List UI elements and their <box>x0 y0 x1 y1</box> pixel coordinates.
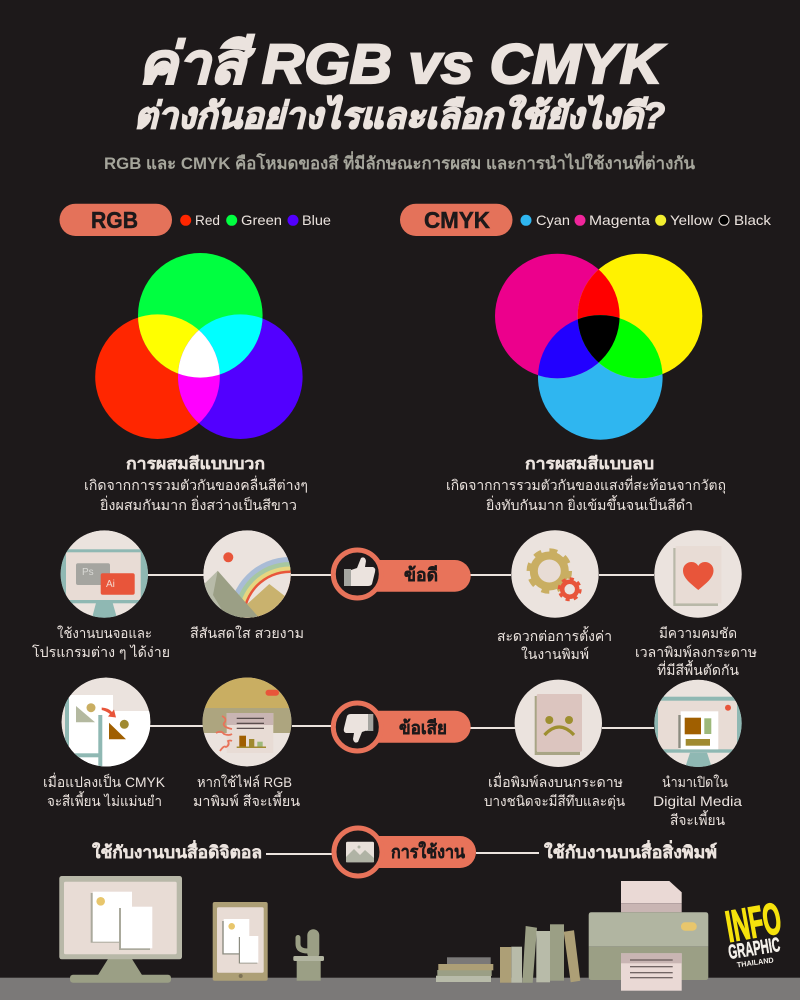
text block: subtractive mixing <box>446 454 726 513</box>
text block: additive mixing <box>84 454 308 513</box>
caption: RGB file printed shifts colour: หากใช้ไฟล์ RGB <box>197 774 292 790</box>
caption: sharp on contrast paper: ที่มีสีพื้นตัดกัน <box>657 660 739 678</box>
text block: additive mixing: ยิ่งผสมกันมาก ยิ่งสว่างเป็นสีขาว <box>100 496 297 513</box>
RGB legend <box>180 212 331 228</box>
CMYK legend: Yellow <box>670 212 714 228</box>
caption: easy print settings: สะดวกต่อการตั้งค่า <box>497 626 612 644</box>
caption: shifts in digital media <box>653 774 742 828</box>
badge: pros: ข้อดี <box>404 565 438 585</box>
icon: rainbow and mountains <box>203 530 291 618</box>
CMYK heading pill: CMYK <box>424 207 490 233</box>
CMYK legend: Magenta <box>589 212 650 228</box>
caption: shifts in digital media: สีจะเพี้ยน <box>670 810 725 828</box>
text block: subtractive mixing: ยิ่งทับกันมาก ยิ่งเข้มขึ้นจนเป็นสีดำ <box>486 495 693 513</box>
title: ค่าสี RGB vs CMYK <box>138 32 666 95</box>
icon: picture <box>346 842 374 862</box>
caption: CMYK conversion shifts colour <box>43 773 166 809</box>
CMYK legend: Black <box>734 212 772 228</box>
illustration: printer <box>589 881 708 991</box>
caption: dull on some papers: เมื่อพิมพ์ลงบนกระดาษ <box>488 773 623 790</box>
icon: monitor with Ps and Ai: Ai <box>106 579 115 590</box>
icon: monitor with Ps and Ai: Ps <box>82 567 94 578</box>
usage label: digital: ใช้กับงานบนสื่อดิจิตอล <box>92 840 262 862</box>
caption: easy print settings: ในงานพิมพ์ <box>521 646 589 662</box>
caption: shifts in digital media: นำมาเปิดใน <box>662 774 728 790</box>
RGB additive Venn diagram <box>95 253 303 439</box>
text block: additive mixing: เกิดจากการรวมตัวกันของคลื่นสีต่างๆ <box>84 476 308 493</box>
caption: sharp on contrast paper <box>635 625 757 678</box>
floor <box>0 978 800 1000</box>
badge: usage <box>334 828 476 876</box>
badge: pros <box>333 550 471 598</box>
caption: sharp on contrast paper: มีความคมชัด <box>659 625 737 641</box>
CMYK heading pill <box>400 204 512 236</box>
icon: thumbs up <box>344 557 375 586</box>
caption: use on screen: โปรแกรมต่าง ๆ ได้ง่าย <box>32 644 170 660</box>
RGB heading pill: RGB <box>91 207 138 233</box>
icon: book with heart <box>654 530 742 618</box>
caption: dull on some papers <box>484 773 625 810</box>
caption: CMYK conversion shifts colour: จะสีเพี้ยน ไม่แม่นยำ <box>47 791 162 809</box>
title: ต่างกันอย่างไรและเลือกใช้ยังไงดี? <box>134 95 665 136</box>
caption: dull on some papers: บางชนิดจะมีสีทึบและตุ่น <box>484 793 625 810</box>
icon: printing RGB file <box>200 675 295 766</box>
illustration: upright books <box>500 924 580 983</box>
caption: CMYK conversion shifts colour: เมื่อแปลงเป็น CMYK <box>43 773 166 790</box>
icon: monitor with Ps and Ai <box>58 530 148 618</box>
caption: use on screen <box>32 625 170 660</box>
RGB legend: Red <box>195 212 220 228</box>
caption: RGB file printed shifts colour <box>193 774 300 809</box>
CMYK legend: Cyan <box>536 212 570 228</box>
caption: vivid colors: สีสันสดใส สวยงาม <box>190 625 304 641</box>
title <box>134 32 666 136</box>
illustration: desktop monitor <box>59 876 182 983</box>
caption: easy print settings <box>497 626 612 662</box>
RGB legend: Green <box>241 212 282 228</box>
logo: Infographic Thailand <box>722 894 785 969</box>
icon: gears <box>511 530 599 618</box>
RGB legend: Blue <box>302 212 331 228</box>
subtitle: RGB และ CMYK คือโหมดของสี ที่มีลักษณะการผสม และการนำไปใช้งานที่ต่างกัน <box>104 151 695 173</box>
badge: cons <box>333 703 471 751</box>
illustration: stack of books <box>436 957 493 982</box>
illustration: tablet <box>213 902 268 981</box>
logo: Infographic Thailand: THAILAND <box>736 955 775 969</box>
icon: sad book <box>515 680 602 767</box>
icon: colour shift conversion <box>62 678 150 767</box>
caption: use on screen: ใช้งานบนจอและ <box>57 625 152 641</box>
CMYK legend <box>520 212 772 228</box>
badge: cons: ข้อเสีย <box>399 718 447 738</box>
text block: additive mixing: การผสมสีแบบบวก <box>126 454 265 473</box>
caption: RGB file printed shifts colour: มาพิมพ์ สีจะเพี้ยน <box>193 791 300 809</box>
RGB heading pill <box>60 204 172 236</box>
icon: thumbs down <box>344 714 373 743</box>
usage label: print: ใช้กับงานบนสื่อสิ่งพิมพ์ <box>544 840 717 862</box>
text block: subtractive mixing: การผสมสีแบบลบ <box>525 454 654 473</box>
CMYK subtractive Venn diagram <box>495 254 702 440</box>
badge: usage: การใช้งาน <box>391 841 466 862</box>
illustration: cactus <box>293 929 324 981</box>
icon: monitor with print design <box>654 680 742 768</box>
caption: shifts in digital media: Digital Media <box>653 793 742 809</box>
caption: sharp on contrast paper: เวลาพิมพ์ลงกระดาษ <box>635 644 757 660</box>
text block: subtractive mixing: เกิดจากการรวมตัวกันของแสงที่สะท้อนจากวัตถุ <box>446 476 726 494</box>
